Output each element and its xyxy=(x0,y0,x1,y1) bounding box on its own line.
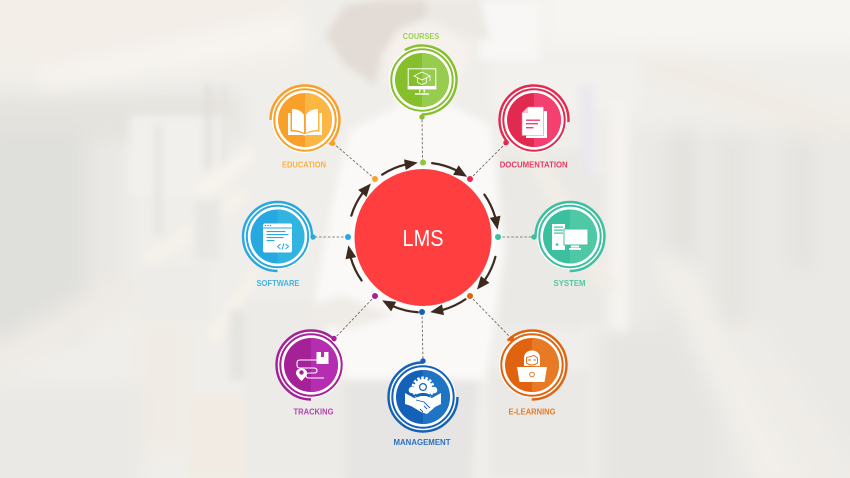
icon: desktop computer xyxy=(552,224,588,250)
node: documentation xyxy=(485,71,583,169)
node: software xyxy=(243,202,316,271)
node: tracking xyxy=(276,330,346,400)
dashed connectors xyxy=(313,117,534,361)
label: documentation: DOCUMENTATION xyxy=(500,160,568,170)
cycle arrows xyxy=(338,152,508,322)
person skirt xyxy=(345,380,478,478)
node: education xyxy=(270,86,340,154)
node: management xyxy=(388,358,458,432)
person hair xyxy=(325,0,440,85)
label: courses: COURSES xyxy=(403,31,440,41)
center hub: LMS xyxy=(350,165,496,310)
label: software: SOFTWARE xyxy=(256,278,300,288)
hub dots xyxy=(345,160,501,315)
icon: code window xyxy=(263,224,292,252)
label: education: EDUCATION xyxy=(282,160,326,170)
center hub: LMS: LMS xyxy=(402,225,444,251)
label: system: SYSTEM xyxy=(554,278,586,288)
node: system xyxy=(531,202,604,271)
icon: monitor with graduation cap xyxy=(408,69,436,95)
icon: gear team handshake xyxy=(405,378,441,414)
icon: documents xyxy=(522,107,547,138)
node: courses xyxy=(375,33,469,127)
node: e-learning xyxy=(483,316,581,414)
person sweater xyxy=(315,105,505,380)
label: tracking: TRACKING xyxy=(294,406,334,416)
label: management: MANAGEMENT xyxy=(394,437,451,447)
label: e-learning: E-LEARNING xyxy=(508,406,556,416)
icon: open book xyxy=(288,109,322,136)
icon: route with parcel and pin xyxy=(296,352,328,381)
icon: person with laptop xyxy=(517,350,547,382)
person face xyxy=(382,25,470,115)
